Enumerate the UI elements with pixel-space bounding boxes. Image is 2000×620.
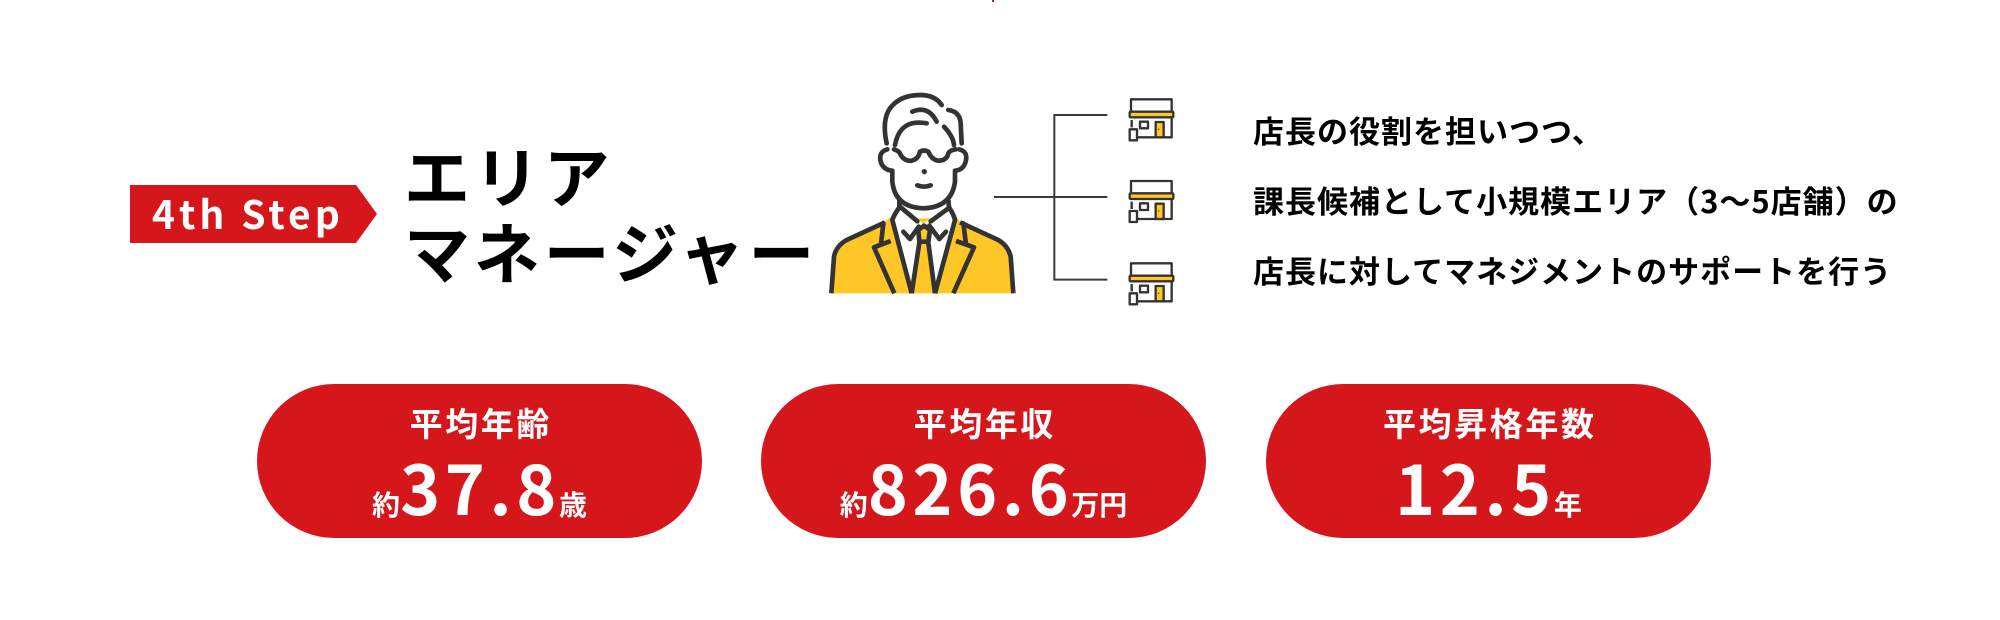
stat pill: average income: 平均年収: [914, 398, 1056, 446]
stat pill: average years to promotion: 12.5年: [1395, 436, 1582, 535]
stat pill: average age: 約37.8歳: [372, 436, 587, 535]
stat pill: average years to promotion: 平均昇格年数: [1383, 398, 1597, 446]
description text: 課長候補として小規模エリア（3～5店舗）の: [1253, 177, 1899, 222]
title: マネージャー: [404, 202, 818, 298]
description text: [1253, 107, 1899, 292]
icon: store 1: [1130, 99, 1173, 140]
icon: store 3: [1130, 263, 1173, 304]
stat pill: average years to promotion: [1266, 384, 1711, 538]
stat pill: average age: 平均年齢: [410, 398, 552, 446]
step label arrow tag: 4th Step: [152, 185, 344, 241]
manager figure: [831, 95, 1014, 293]
title: [404, 126, 818, 298]
stat pill: average age: [257, 384, 702, 538]
top edge red tick: [992, 0, 994, 2]
stat pill: average income: [761, 384, 1206, 538]
icon: manager with three stores: [829, 92, 1174, 306]
stat pill: average income: 約826.6万円: [840, 436, 1127, 535]
title: エリア: [404, 126, 613, 222]
org connector lines: [994, 115, 1107, 280]
description text: 店長に対してマネジメントのサポートを行う: [1253, 247, 1892, 292]
icon: store 2: [1130, 181, 1173, 222]
description text: 店長の役割を担いつつ、: [1253, 107, 1604, 152]
